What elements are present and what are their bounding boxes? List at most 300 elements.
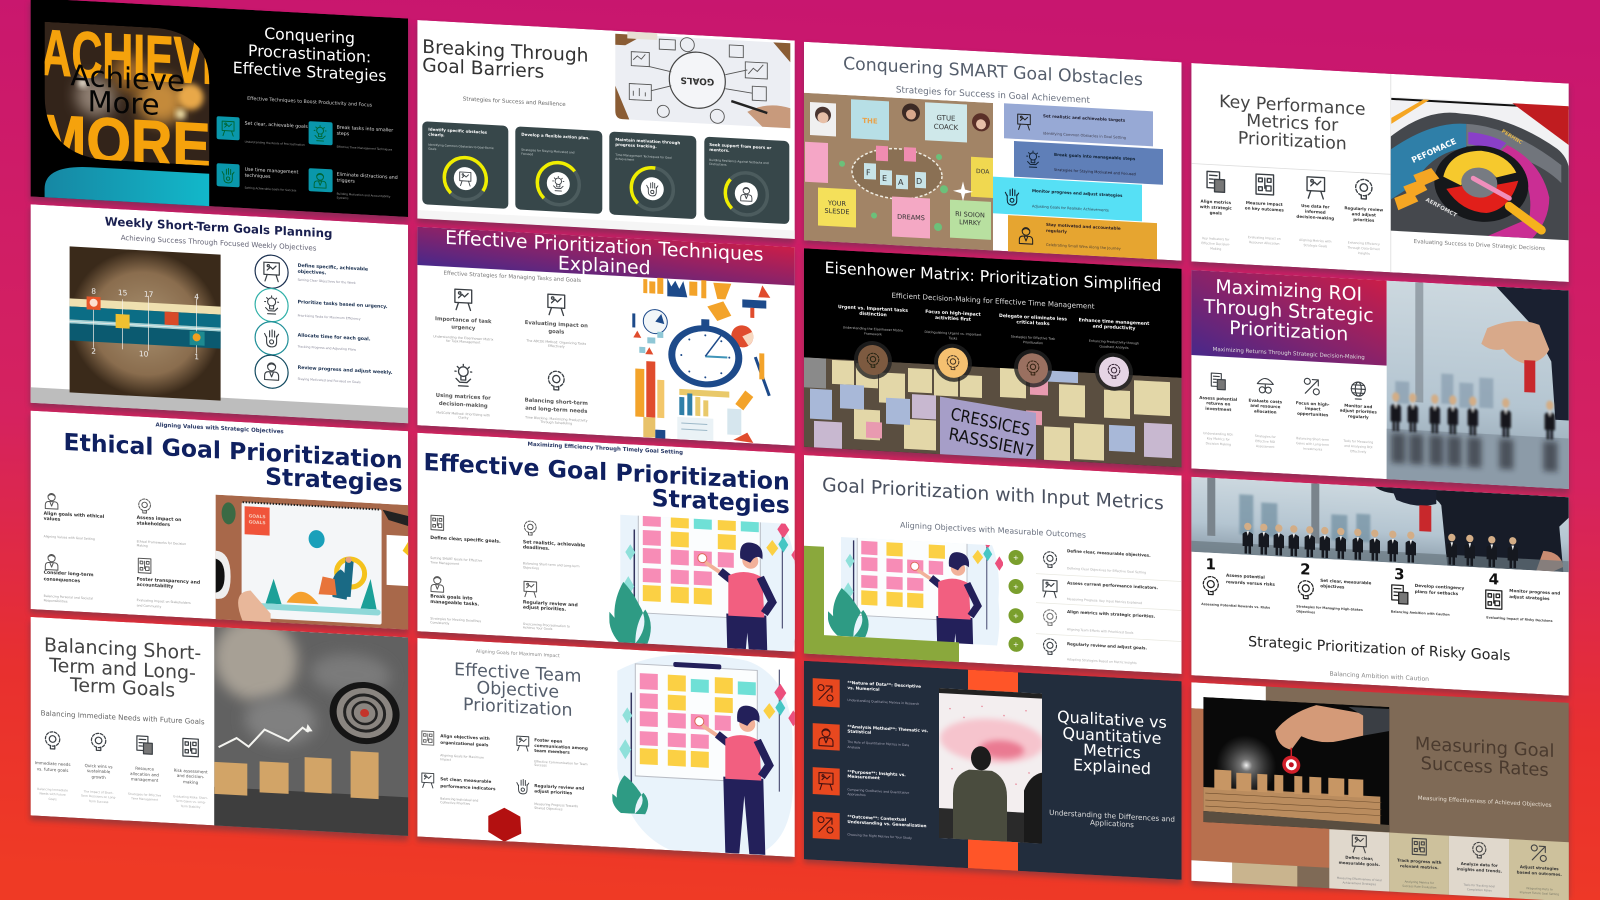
step 4: Stay motivated and accountable (1046, 222, 1121, 231)
photo: corkboard notes: F (866, 168, 871, 177)
column 3: Resource (135, 766, 154, 772)
photo: person at data screen (939, 688, 1044, 844)
photo: performance gauge: AERFOMCT (1424, 197, 1458, 219)
item 3: manageable tasks. (430, 599, 479, 608)
column 1: Measuring Effectiveness of Goal (1337, 876, 1382, 882)
photo: desk with notebook: GOALS (249, 513, 266, 520)
step 3: Balancing Ambition with Caution (1391, 610, 1450, 617)
photo: Achieve More sign: ACHIEVE (41, 16, 231, 99)
title: Breaking Through (422, 37, 589, 67)
metric 1: Assess potential (1199, 395, 1238, 402)
title: Success Rates (1421, 753, 1549, 781)
column 2: growth (91, 774, 106, 780)
item 1: Aligning Values with Goal Setting (44, 534, 95, 541)
photo: corkboard notes: THE (862, 117, 878, 126)
photo: desk with notebook (216, 495, 409, 630)
photo: corkboard notes: GTUE (937, 114, 955, 123)
metric 4 (1340, 381, 1377, 455)
title (1415, 733, 1554, 781)
title: Strategies (652, 484, 790, 519)
metric 4: Insights (1358, 251, 1370, 256)
quadrant 3: Prioritization (1023, 340, 1043, 345)
item 2 (813, 722, 929, 755)
photo: corkboard notes: D (916, 177, 922, 186)
column 1 (1329, 829, 1389, 893)
metric 3: Align metrics with strategic priorities. (1067, 609, 1156, 619)
item 2: Effective Communication for Team (534, 759, 588, 766)
metric 3: Gains with Long-term (1296, 441, 1329, 447)
item 1: Align objectives with (440, 733, 490, 741)
title: Weekly Short-Term Goals Planning (105, 214, 332, 241)
item 3 (422, 773, 496, 807)
photo: corkboard notes: LMRKY (959, 218, 981, 227)
subtitle (1049, 808, 1175, 831)
quadrant 3: Delegate or eliminate less (999, 313, 1067, 323)
metric 2: Evaluate costs (1249, 398, 1283, 404)
metric 2: on key outcomes (1245, 205, 1284, 213)
photo: Achieve More sign: More (88, 84, 160, 122)
photo: timeline (70, 246, 221, 401)
title (64, 428, 403, 498)
item: urgency (433, 288, 493, 345)
quadrant 4: Enhance time management (1079, 317, 1150, 327)
metric 1: investment (1205, 406, 1231, 412)
item: impact: Effectively (548, 344, 565, 349)
quadrant 4: Enhancing Productivity through (1089, 339, 1139, 345)
subtitle: Measuring Effectiveness of Achieved Objectives (1418, 796, 1552, 809)
item 4: Shared Objectives (534, 806, 563, 811)
photo: corkboard notes: COACK (934, 123, 959, 132)
card 1: Identifying Common Obstacles to Goal-Barrie (428, 143, 494, 150)
metric 3 (1296, 176, 1334, 249)
step 1 (1201, 555, 1275, 610)
subtitle: Strategies for Success and Resilience (463, 96, 566, 108)
metric 1: Defining Clear Objectives for Effective Goal Setting (1067, 566, 1146, 575)
card 2: Focused (521, 152, 533, 156)
metric 2: and resource (1250, 403, 1281, 409)
item: eliminate distractions (309, 168, 398, 203)
title (44, 634, 201, 703)
photo: corkboard notes: DREAMS (897, 213, 925, 222)
metric 2: + (1013, 583, 1019, 591)
card 1: Identify specific obstacles (428, 127, 488, 135)
item 4: Evaluating Impact on Stakeholders (137, 598, 191, 605)
card 2: Develop a flexible action plan. (521, 132, 590, 140)
title: Effective Team (454, 660, 581, 687)
slide: Weekly Short-Term Goals (31, 204, 409, 424)
subtitle: Strategies for Success in Goal Achievement (896, 85, 1091, 106)
item 1: Setting SMART Goals for Effective (430, 556, 482, 563)
photo: figures and hand (1386, 276, 1569, 491)
column 4 (1509, 839, 1569, 900)
item 3: Responsibilities (44, 598, 68, 604)
photo: corkboard notes: DOA (976, 168, 990, 176)
step 4: regularly (1046, 228, 1067, 234)
item: matrices: MoSCoW Method: Prioritizing with (436, 411, 490, 417)
item 3: Approaches (847, 792, 866, 797)
item: balancing: and long-term needs (525, 406, 587, 415)
title: Eisenhower Matrix: Prioritization Simplified (825, 258, 1161, 295)
quadrant 2: Tasks (948, 336, 958, 341)
metric 2: Assess current performance indicators. (1067, 580, 1158, 590)
photo: timeline: 8 (91, 287, 96, 296)
slide: Qualitative vs Quantitative Metrics (804, 661, 1182, 880)
step 3: Develop contingency (1415, 583, 1464, 591)
step 4: Review progress and adjust weekly. (298, 365, 393, 376)
item: matrices (436, 363, 491, 421)
item: balancing: Through Scheduling (539, 420, 572, 426)
item 4: adjust priorities. (523, 604, 566, 613)
item: set goals: Understanding the Roots of Procrastination (245, 140, 305, 147)
step 2: objectives (1320, 583, 1345, 590)
item 4: Choosing the Right Metrics for Your Study (847, 833, 912, 840)
item 4: adjust priorities (534, 788, 573, 795)
column 3: Time Management (130, 796, 159, 802)
card 2 (515, 126, 602, 216)
subtitle: Balancing Ambition with Caution (1330, 671, 1429, 683)
card 4: Building Resilience Against Setbacks and (709, 158, 769, 165)
column 4: based on outcomes. (1517, 869, 1562, 877)
step 4: adjust strategies (1509, 594, 1550, 601)
metric 4: Monitor and (1344, 403, 1372, 409)
title: Effective Strategies (233, 58, 386, 85)
item 1: organizational goals (440, 740, 489, 747)
item 2: communication among (534, 743, 588, 751)
column 3: Completion Rates (1467, 887, 1492, 893)
card 4: Seek support from peers or (709, 142, 771, 150)
column 3: Analyze data for (1461, 861, 1498, 868)
photo: performance gauge: PERHNC (1500, 128, 1523, 146)
metric 2: Resource Allocation (1249, 240, 1280, 246)
item 2: Assess impact on (137, 515, 181, 523)
title: Ethical Goal Prioritization (64, 428, 403, 474)
quadrant 2: Distinguishing Urgent vs. Important (925, 330, 982, 337)
title (424, 448, 790, 519)
title: Strategic Prioritization of Risky Goals (1248, 634, 1510, 664)
item 2: Success (534, 763, 547, 768)
metric 3: opportunities (1297, 411, 1329, 417)
slide: Strategic Prioritization of Risky Goals (1191, 472, 1569, 696)
metric 1: + (1013, 554, 1019, 562)
item 3: Measurement (847, 774, 880, 780)
item 4 (137, 558, 200, 611)
metric 1: goals (1210, 210, 1223, 216)
item: urgency: Importance of task (435, 316, 492, 325)
subtitle: Achieving Success Through Focused Weekly Objectives (121, 233, 317, 253)
metric 3: impact (1305, 406, 1321, 412)
step 1 (1004, 103, 1153, 146)
step 1: 1 (1205, 555, 1216, 574)
metric 4: Through Data-Driven (1347, 245, 1380, 251)
item 1: **Nature of Data**: Descriptive (847, 680, 921, 689)
column 3: insights and trends. (1457, 866, 1502, 874)
metric 4: Tools for Measuring (1342, 439, 1373, 444)
title: Goal Prioritization with Input Metrics (822, 475, 1164, 515)
title: Conquering (264, 24, 355, 48)
item: time management (217, 163, 298, 193)
item: time management: Setting Achievable Goals for Success (245, 186, 297, 192)
item 2: Foster open (534, 737, 562, 744)
metric 2: Measuring Progress: Key Input Metrics Explained (1067, 597, 1142, 605)
metric 1: with strategic (1200, 204, 1232, 211)
step 2 (1014, 141, 1163, 185)
photo: hand placing target on blocks (1203, 697, 1389, 833)
step 2: Strategies for Staying Motivated and Focused (1054, 168, 1136, 176)
slide: Goal Prioritization with Input Metrics (804, 455, 1182, 698)
photo: Achieve More sign: MORE (39, 100, 211, 183)
item 3: Set clear, measurable (440, 776, 491, 784)
item 2: deadlines. (523, 544, 550, 552)
column 3: Strategies for Effective (128, 792, 161, 798)
item 2 (517, 736, 588, 770)
item: urgency: urgency (451, 325, 476, 332)
item 4: Foster transparency and (137, 576, 200, 586)
step 1: Set realistic and achievable targets (1043, 113, 1126, 123)
title: Through Strategic (1203, 296, 1374, 327)
photo: corkboard notes (804, 93, 995, 251)
card 1 (422, 121, 508, 211)
column 4: and decision- (177, 773, 205, 779)
item: balancing: Time Blocking: Maximizing Productivity (524, 415, 588, 423)
metric 4: Regularly review (1344, 205, 1383, 212)
card 1: clearly. (428, 132, 445, 138)
item: urgency: for Task Management (446, 339, 481, 345)
item: break tasks: Effective Time Management Techniques (337, 145, 393, 152)
photo: wall of sticky notes (804, 352, 1182, 470)
title: Metrics (1083, 740, 1141, 762)
item: matrices: Clarity (458, 415, 469, 420)
photo: timeline: 4 (194, 292, 199, 301)
photo: goals sketch: GOALS (680, 74, 714, 86)
item 2: Ethical Frameworks for Decision (137, 539, 186, 546)
column 4: making (183, 779, 199, 785)
quadrant 1: Understanding the Eisenhower Matrix (843, 325, 903, 333)
step 3 (993, 177, 1142, 221)
metric 4: regularly (1348, 414, 1369, 420)
slide: Maximizing ROI (1191, 265, 1569, 491)
item 3: Collective Priorities (440, 800, 470, 806)
quadrant 1: Framework (864, 332, 882, 337)
column 3 (128, 735, 161, 802)
subtitle: Aligning Objectives with Measurable Outcomes (900, 521, 1086, 540)
metric 4: Enhancing Efficiency (1348, 240, 1380, 246)
item: break tasks: Break tasks into smaller (337, 125, 393, 134)
item 3: Break goals into (430, 593, 473, 602)
metric 3: Investments (1303, 447, 1323, 452)
column 3: management (131, 776, 159, 783)
title: Procrastination: (248, 41, 371, 66)
card 3: Time Management Techniques for Goal (614, 153, 672, 160)
column 2: The Impact of Short- (83, 789, 113, 795)
column 1: Achievement Strategies (1343, 881, 1377, 886)
item 4: Regularly review and (534, 783, 584, 791)
column 3: Tools for Tracking Goal (1463, 883, 1495, 888)
item: set goals (217, 116, 308, 147)
metric 3: Balancing Short-term (1296, 436, 1329, 442)
item 2: Statistical (847, 729, 872, 735)
item 2: stakeholders (137, 520, 170, 528)
title (1203, 275, 1374, 347)
subtitle: Efficient Decision-Making for Effective Time Management (891, 291, 1095, 311)
title: Objective (477, 678, 559, 703)
column 1: Define clear, (1345, 855, 1374, 861)
item: impact: goals (548, 329, 564, 336)
slide: Balancing Short-Term and Long-Term Goals (31, 605, 409, 837)
item 3 (813, 767, 909, 799)
item 3: performance indicators (440, 783, 496, 791)
column 1: measurable goals. (1339, 860, 1380, 867)
metric 4: and Analyzing ROI (1344, 444, 1373, 449)
colour blocks (1191, 682, 1329, 889)
photo: timeline: 15 (118, 288, 128, 298)
title: Term Goals (69, 674, 175, 702)
photo: desk with notebook: GOALS (249, 519, 266, 526)
step 4: Celebrating Small Wins Along the Journey (1046, 243, 1122, 251)
title (1220, 94, 1365, 150)
slide: Effective Prioritization Techniques (417, 225, 795, 446)
quadrant 3: Strategies for Effective Task (1011, 335, 1055, 341)
quadrant 1: Urgent vs. Important tasks (838, 304, 908, 314)
quadrant 2 (925, 309, 982, 383)
quadrant 1: distinction (859, 311, 887, 318)
item: eliminate distractions: triggers (337, 178, 355, 185)
metric 2: allocation (1254, 408, 1277, 415)
step 1: Identifying Common Obstacles in Goal Setting (1043, 131, 1126, 140)
subtitle: Maximizing Returns Through Strategic Decision-Making (1213, 347, 1365, 361)
column 2 (80, 732, 116, 805)
photo: timeline: 10 (139, 349, 149, 359)
step 1: Assessing Potential Rewards vs. Risks (1201, 602, 1270, 610)
step 1: Setting Clear Objectives for the Week (298, 278, 356, 285)
metric 3: Focus on high- (1296, 400, 1330, 407)
metric 1: Understanding ROI: (1203, 431, 1233, 437)
step 2: Set clear, measurable (1320, 578, 1371, 585)
item 1: Aligning Goals for Maximum (440, 753, 484, 760)
item 4: **Outcome**: Contextual (847, 814, 907, 822)
quadrant 2: Focus on high-impact (925, 309, 981, 318)
item 2: Balancing Short-term and Long-term (523, 561, 580, 568)
column 2: Analyzing Metrics for (1405, 879, 1435, 885)
item 1 (44, 493, 105, 542)
illustration: kanban board (609, 486, 801, 694)
slide: Ethical Goal Prioritization (31, 411, 409, 630)
title (1057, 707, 1167, 779)
subtitle: Understanding the Differences and (1049, 808, 1175, 824)
kicker: Maximizing Efficiency Through Timely Goal Setting (528, 442, 683, 456)
step 4: Staying Motivated and Focused on Goals (298, 377, 361, 384)
step 1: Assess potential (1226, 573, 1265, 580)
column 1: Goals (49, 797, 57, 801)
item 2: **Analysis Method**: Thematic vs. (847, 724, 929, 733)
title (423, 39, 587, 78)
quadrant 4: and productivity (1093, 323, 1135, 332)
metric 1 (1199, 372, 1238, 447)
title: Balancing Short- (44, 634, 201, 665)
orange accent blocks (968, 670, 1018, 871)
item 4: accountability (137, 582, 173, 590)
item: break tasks (309, 121, 393, 152)
subtitle: Balancing Immediate Needs with Future Goals (41, 708, 205, 726)
photo: wall of sticky notes: CRESSICES (949, 405, 1031, 441)
slide: Eisenhower Matrix (804, 248, 1182, 470)
slide: Breaking Through Goal Barriers (417, 20, 795, 240)
title: Prioritization (1229, 317, 1348, 346)
step 2: Prioritize tasks based on urgency. (298, 299, 388, 310)
photo: wall of sticky notes: RASSSIEN7 (947, 424, 1035, 462)
item: impact: The ABCDE Method: Organizing Tasks (525, 339, 587, 346)
title: Term and Long- (48, 654, 196, 684)
item: balancing (524, 369, 588, 426)
column 4: Integrating Data to (1526, 886, 1553, 892)
column 3: allocation and (130, 771, 159, 778)
column 1 (35, 731, 70, 802)
metric 2 (1008, 577, 1158, 606)
title: Quantitative (1063, 724, 1161, 748)
column 3 (1449, 836, 1509, 899)
photo: corkboard notes: E (882, 174, 887, 183)
step 3: Adjusting Goals for Realistic Achievements (1032, 204, 1109, 213)
column 2 (1389, 833, 1449, 896)
step 2: Break goals into manageable steps (1054, 152, 1136, 161)
title: Qualitative vs (1057, 707, 1167, 732)
step 3: Monitor progress and adjust strategies (1032, 188, 1123, 198)
step 1 (254, 254, 368, 288)
quadrant 3 (999, 313, 1067, 389)
item 4: Understanding vs. Generalization (847, 819, 927, 828)
item 2: team members (534, 748, 570, 755)
photo: corkboard notes: A (898, 178, 904, 187)
item 4 (523, 581, 578, 632)
item 3: Consistently (430, 620, 450, 625)
item 2: Objectives (523, 565, 540, 570)
item 4: and Community (137, 603, 161, 609)
title: Effective Goal Prioritization (424, 448, 790, 496)
item: set goals: Set clear, achievable goals (245, 121, 308, 130)
green accent shape (804, 546, 959, 662)
item 1: Align goals with ethical (44, 511, 105, 520)
metric 1: Key Metrics for (1207, 436, 1231, 442)
column 4: Adjust strategies (1520, 864, 1559, 871)
quadrant 3: critical tasks (1016, 319, 1050, 327)
title: Explained (1073, 755, 1151, 778)
teal accent shape (45, 165, 209, 207)
step 1: objectives. (298, 269, 327, 276)
metric 1: Decision Making (1206, 441, 1231, 447)
metric 4: and adjust (1352, 211, 1376, 218)
photo: timeline: 2 (91, 347, 96, 356)
item 1: Impact (440, 757, 452, 762)
metric 2: Strategies for (1255, 434, 1277, 439)
header band (1191, 270, 1387, 366)
item 2: Making (137, 543, 148, 548)
card 4: mentors. (709, 147, 730, 153)
card 2: Strategies for Staying Motivated and (521, 148, 575, 155)
title (454, 660, 581, 721)
metric 4: + (1013, 641, 1019, 649)
item: balancing: Balancing short-term (525, 398, 588, 407)
item 3: Balancing Personal and Societal (44, 594, 93, 601)
illustration: clock and charts (632, 276, 770, 445)
metric 1 (1008, 545, 1151, 575)
item: impact: Evaluating impact on (525, 320, 588, 329)
item 4: Regularly review and (523, 599, 578, 608)
item 4: Achieve Your Goals (523, 625, 553, 631)
item 2: The Role of Quantitative Metrics in Data (846, 740, 909, 747)
title: Prioritization (1238, 129, 1347, 154)
title: Metrics for (1246, 111, 1339, 136)
metric 1: Key Indicators for (1202, 236, 1230, 242)
metric 4: Regularly review and adjust goals. (1067, 641, 1147, 651)
